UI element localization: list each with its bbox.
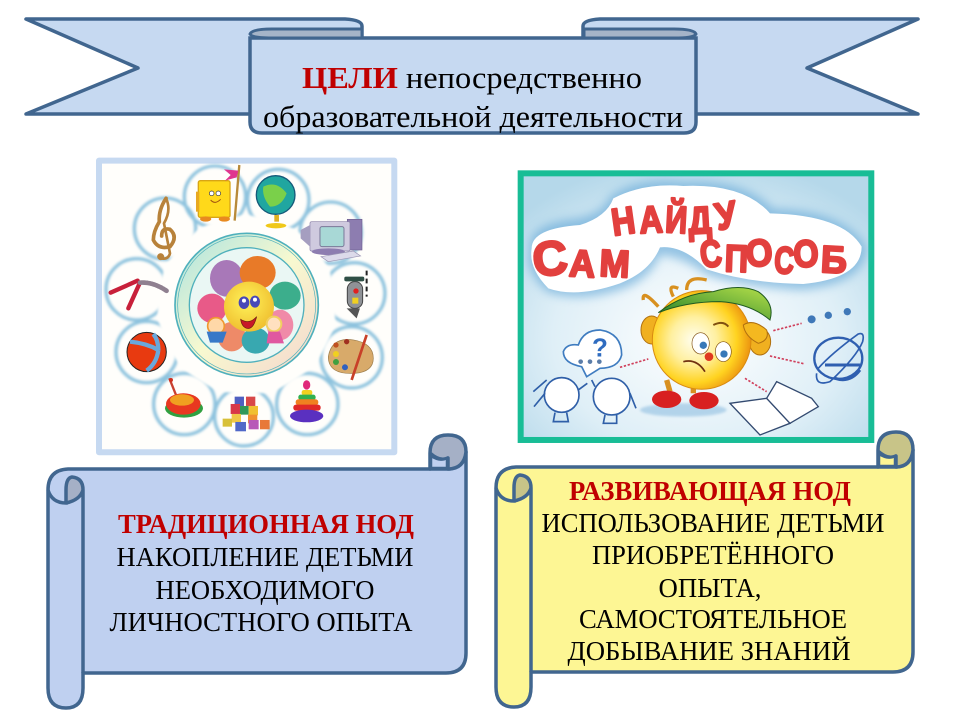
computer icon: [301, 219, 362, 262]
girl figure: [267, 317, 284, 343]
picture background and frame: [521, 173, 871, 440]
word: СПОСОБ: О: [744, 230, 774, 275]
word: СПОСОБ: С: [773, 239, 795, 283]
book with flag icon: [196, 165, 239, 222]
developing heading: РАЗВИВАЮЩАЯ НОД: [569, 476, 851, 506]
traditional line 3: ЛИЧНОСТНОГО ОПЫТА: [110, 607, 413, 637]
scroll left inner roll: [496, 475, 531, 672]
palette icon: [328, 335, 373, 380]
traditional line 2: НЕОБХОДИМОГО: [156, 575, 374, 605]
three dots: [808, 308, 851, 323]
word: САМ: А: [568, 241, 597, 286]
title ribbon: [26, 15, 918, 134]
ribbon left fold shade: [250, 29, 362, 38]
title text line 1: ЦЕЛИ непосредственно: [302, 60, 642, 95]
ribbon right tail: [583, 19, 918, 114]
smiling flower face: [224, 282, 274, 332]
developing line 5: ДОБЫВАНИЕ ЗНАНИЙ: [568, 636, 850, 666]
scroll left curl shade: [66, 477, 83, 503]
question thought bubble: ?: [592, 333, 608, 363]
item rings: [106, 166, 385, 446]
word: НАЙДУ: Й: [664, 197, 688, 242]
scroll body: [48, 452, 466, 708]
word: СПОСОБ: [697, 230, 848, 283]
word: САМ: [530, 230, 631, 288]
word: СПОСОБ: О: [792, 233, 820, 276]
word: САМ: М: [599, 241, 631, 286]
ribbon left tail: [26, 19, 362, 114]
ribbon right fold shade: [584, 29, 696, 38]
scroll right tab: [431, 456, 447, 468]
title text line 2: образовательной деятельности: [263, 99, 683, 134]
scroll left curl shade: [514, 475, 531, 501]
word: САМ: С: [530, 230, 570, 288]
word: НАЙДУ: Д: [687, 199, 713, 243]
developing line 4: САМОСТОЯТЕЛЬНОЕ: [579, 604, 847, 634]
cloud: [531, 185, 862, 292]
cloud shadow: [529, 181, 867, 297]
scroll left inner roll: [48, 477, 83, 673]
left scroll: traditional: [48, 435, 466, 708]
internet explorer logo: [814, 334, 863, 383]
word: СПОСОБ: П: [724, 238, 749, 281]
treble clef icon: [153, 198, 174, 260]
kolobok character: [640, 279, 771, 417]
developing line 1: ИСПОЛЬЗОВАНИЕ ДЕТЬМИ: [542, 508, 884, 538]
word: СПОСОБ: Б: [820, 237, 848, 282]
question thought bubble: [563, 330, 622, 377]
flower petals: [197, 256, 301, 354]
white fade around centre: [157, 216, 336, 394]
ribbon centre panel: [250, 38, 696, 133]
spinning top icon: [165, 378, 203, 418]
scroll right curl: [878, 432, 913, 467]
word: НАЙДУ: [609, 192, 741, 244]
dotted pointers: [620, 323, 805, 392]
picture: find the way yourself: [521, 173, 871, 440]
traffic light character icon: [344, 271, 367, 318]
open book sketch: [730, 382, 818, 435]
word: НАЙДУ: А: [638, 199, 664, 242]
jump rope icon: [111, 281, 167, 308]
developing line 2: ПРИОБРЕТЁННОГО: [592, 540, 834, 570]
picture frame: [99, 161, 394, 452]
word: НАЙДУ: У: [712, 192, 741, 238]
two small sketched characters: [533, 378, 636, 423]
word: НАЙДУ: Н: [609, 199, 638, 244]
ball icon: [127, 332, 166, 372]
scroll right tab: [879, 454, 895, 466]
traditional line 1: НАКОПЛЕНИЕ ДЕТЬМИ: [116, 542, 414, 572]
developing line 3: ОПЫТА,: [658, 573, 762, 603]
centre disc: [175, 233, 318, 377]
traditional heading: ТРАДИЦИОННАЯ НОД: [118, 509, 414, 539]
word: СПОСОБ: С: [697, 232, 724, 277]
white gap over ribbon top: [364, 15, 581, 37]
scroll right curl: [430, 435, 466, 469]
picture: educational areas wheel: [99, 161, 394, 452]
heading words: [530, 192, 848, 288]
globe icon: [256, 176, 295, 228]
toy blocks icon: [223, 397, 270, 431]
right scroll: developing: [496, 432, 913, 707]
scroll body: [496, 450, 913, 707]
toy pyramid icon: [290, 380, 323, 422]
boy figure: [207, 318, 227, 343]
